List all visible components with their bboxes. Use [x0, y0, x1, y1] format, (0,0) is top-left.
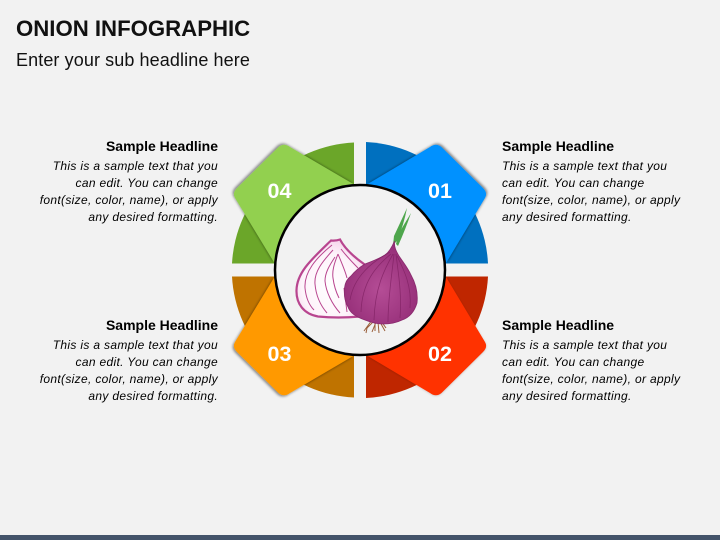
text block: 03: any desired formatting.	[88, 389, 218, 403]
text block: 04: This is a sample text that you	[53, 159, 218, 173]
text block: 02: font(size, color, name), or apply	[502, 372, 680, 386]
number: 03: 03	[268, 342, 291, 366]
arc: red	[366, 276, 488, 398]
leaves	[393, 208, 411, 246]
arc: green	[232, 142, 354, 264]
text block: 03: Sample Headline	[106, 317, 218, 333]
text block: 04: Sample Headline	[106, 138, 218, 154]
subtitle: Enter your sub headline here	[16, 50, 250, 70]
text block: 02: can edit. You can change	[502, 355, 644, 369]
cut onion half	[296, 240, 364, 318]
text block: 01: font(size, color, name), or apply	[502, 193, 680, 207]
text block: 04: can edit. You can change	[76, 176, 218, 190]
number: 02: 02	[428, 342, 452, 366]
quadrant 03: orange	[232, 276, 354, 398]
text block: 01: This is a sample text that you	[502, 159, 667, 173]
text block: 03: can edit. You can change	[76, 355, 218, 369]
text block: 04: font(size, color, name), or apply	[40, 193, 218, 207]
quadrant 04: green	[232, 142, 354, 264]
diamond: green	[234, 145, 354, 263]
quadrant 02: red	[366, 276, 488, 398]
text block: 01: any desired formatting.	[502, 210, 632, 224]
title: ONION INFOGRAPHIC	[16, 16, 250, 41]
diamond: blue	[367, 145, 486, 263]
footer bar	[0, 535, 720, 540]
text block: 03: font(size, color, name), or apply	[40, 372, 218, 386]
text block: 04	[40, 138, 218, 224]
number: 01: 01	[428, 179, 452, 203]
text block: 03: This is a sample text that you	[53, 338, 218, 352]
diamond: orange	[234, 277, 354, 395]
whole onion bulb	[344, 241, 417, 324]
text block: 02: any desired formatting.	[502, 389, 632, 403]
diamond: red	[367, 277, 486, 395]
center circle	[275, 185, 445, 355]
text block: 03	[40, 317, 218, 403]
number: 04: 04	[268, 179, 291, 203]
text block: 01: Sample Headline	[502, 138, 614, 154]
text block: 02: Sample Headline	[502, 317, 614, 333]
text block: 01: can edit. You can change	[502, 176, 644, 190]
icon: onion	[296, 208, 417, 333]
text block: 02: This is a sample text that you	[502, 338, 667, 352]
arc: orange	[232, 276, 354, 398]
quadrant 01: blue	[366, 142, 488, 264]
text block: 04: any desired formatting.	[88, 210, 218, 224]
text block: 02	[502, 317, 680, 403]
roots	[364, 320, 386, 333]
text block: 01	[502, 138, 680, 224]
onion ribs	[350, 252, 410, 322]
arc: blue	[366, 142, 488, 264]
